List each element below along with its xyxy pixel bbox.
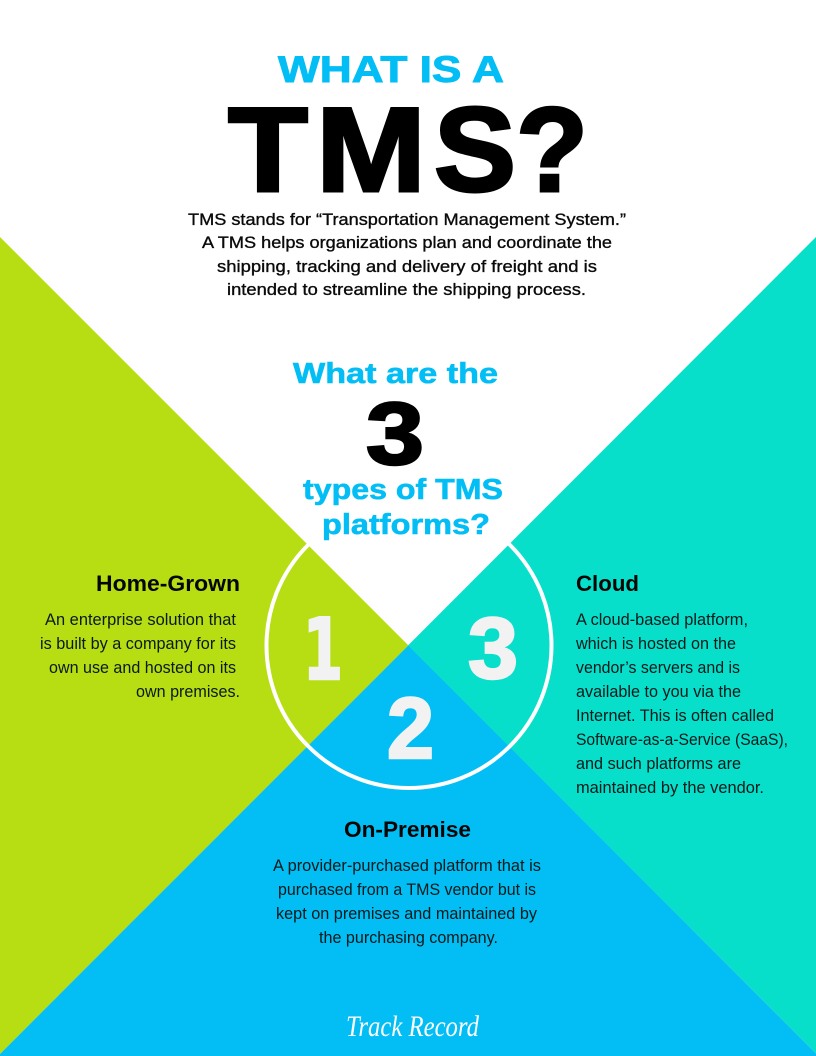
panel text: On-Premise: On-Premise	[344, 817, 471, 842]
heading: what are the 3 types: platforms?	[322, 509, 490, 541]
panel text: Cloud: Internet. This is often called	[576, 707, 774, 725]
panel text: On-Premise: purchased from a TMS vendor but is	[278, 881, 536, 899]
panel text: Cloud: available to you via the	[576, 683, 741, 701]
panel text: Cloud	[575, 571, 788, 797]
circle outline	[266, 503, 552, 788]
panel text: Home-Grown	[40, 571, 240, 701]
panel text: Home-Grown: An enterprise solution that	[45, 611, 236, 629]
text block: intro: A TMS helps organizations plan and coordinate the	[202, 233, 612, 252]
text block: intro: intended to streamline the shipping process.	[227, 280, 586, 299]
panel text: On-Premise: kept on premises and maintained by	[276, 905, 538, 923]
heading: what are the 3 types	[293, 358, 503, 541]
panel text: Cloud: Cloud	[576, 571, 639, 596]
panel: green triangle	[0, 237, 408, 1054]
panel text: Cloud: maintained by the vendor.	[576, 779, 764, 797]
text block: intro: shipping, tracking and delivery of freight and is	[217, 257, 597, 276]
number 3: 3	[468, 601, 518, 697]
panel: blue triangle	[0, 646, 816, 1056]
panel text: Cloud: vendor’s servers and is	[576, 659, 740, 677]
title: WHAT IS A	[278, 49, 504, 90]
heading: what are the 3 types: 3	[366, 384, 424, 483]
logo: Track Record: Track Record	[346, 1010, 480, 1043]
heading: what are the 3 types: types of TMS	[303, 474, 503, 506]
heading: what are the 3 types: What are the	[293, 358, 498, 390]
panel text: Cloud: Software-as-a-Service (SaaS),	[576, 731, 788, 749]
title: ?	[516, 83, 588, 217]
panel text: Cloud: and such platforms are	[576, 755, 741, 773]
title: M	[316, 83, 426, 217]
title	[228, 49, 588, 217]
panel text: Home-Grown: Home-Grown	[96, 571, 240, 596]
panel text: On-Premise: the purchasing company.	[319, 929, 498, 947]
panel text: Cloud: which is hosted on the	[575, 635, 736, 653]
text block: intro	[188, 210, 626, 299]
number 1: 1	[303, 601, 343, 700]
panel text: Home-Grown: own premises.	[136, 683, 240, 701]
panel text: Home-Grown: is built by a company for its	[40, 635, 236, 653]
panel text: Cloud: A cloud-based platform,	[576, 611, 748, 629]
title: T	[228, 83, 308, 217]
number 2: 2	[387, 681, 434, 777]
title: S	[434, 83, 516, 217]
panel text: On-Premise: A provider-purchased platform that is	[273, 857, 541, 875]
text block: intro: TMS stands for “Transportation Management System.”	[188, 210, 626, 229]
panel text: On-Premise	[273, 817, 541, 947]
panel text: Home-Grown: own use and hosted on its	[49, 659, 236, 677]
panel: teal triangle	[408, 237, 816, 1054]
